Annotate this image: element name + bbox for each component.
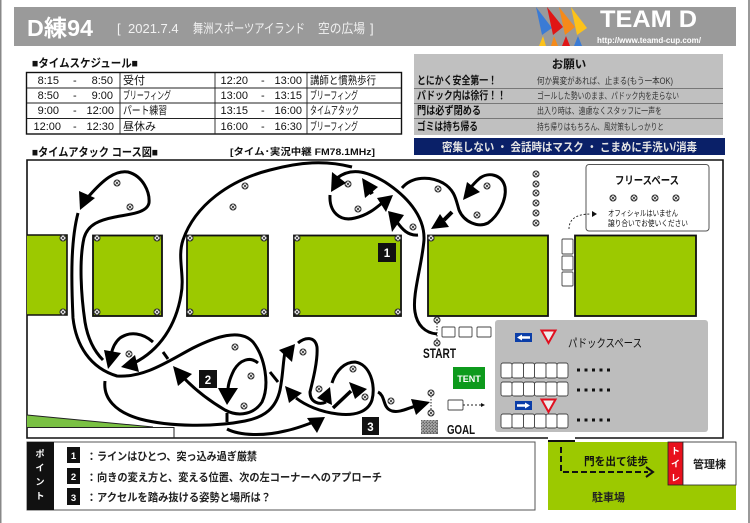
goal flag: [421, 420, 438, 434]
point 3: ：: [86, 492, 97, 504]
event date and venue: 舞洲スポーツアイランド: [193, 21, 305, 36]
paddock entry arrow and sign: [515, 400, 556, 412]
point 2: [67, 468, 382, 484]
point 3: 3: [71, 493, 76, 504]
header band: [14, 6, 736, 46]
schedule table: 12:00: [86, 105, 114, 117]
requests panel: ゴールした勢いのまま、パドック内を走らない: [537, 90, 679, 101]
logo: flags: [536, 7, 587, 46]
radio info: [タイム･実況中継 FM78.1MHz]: [230, 146, 375, 158]
racing line: start into top section: [330, 172, 505, 334]
tent arrow with box: [448, 400, 485, 410]
points side label: ト: [35, 491, 45, 501]
marker 3: 3: [367, 422, 374, 434]
point 2: ：: [86, 472, 97, 484]
requests panel: [414, 54, 723, 135]
toilet: ト: [671, 446, 680, 456]
toilet: [668, 442, 683, 485]
points side label: ポ: [35, 449, 45, 459]
team name: TEAM D: [600, 6, 697, 33]
free space panel: [586, 164, 709, 231]
point 3: [67, 488, 271, 505]
schedule table: 9:00: [92, 90, 113, 102]
tent: [453, 367, 485, 389]
paddock space: [495, 320, 708, 432]
requests panel: 何か異変があれば、止まる(もう一本OK): [537, 75, 673, 86]
schedule table: ブリーフィング: [310, 88, 358, 102]
schedule table: 9:00: [38, 105, 59, 117]
schedule table: 16:30: [274, 121, 302, 133]
marker 2: [199, 370, 217, 388]
schedule table: ブリーフィング: [310, 119, 358, 133]
points side label: イ: [35, 463, 45, 473]
schedule table: 12:20: [220, 75, 248, 87]
point 1: ：: [86, 451, 97, 463]
free space panel: 譲り合いでお使いください: [608, 218, 688, 228]
schedule table: 8:50: [38, 90, 59, 102]
marker 1: 1: [384, 248, 391, 260]
schedule table: ブリーフィング: [123, 88, 171, 102]
start label: START: [423, 345, 456, 361]
marker 3: [362, 417, 379, 435]
toilet: レ: [671, 473, 680, 483]
marker 2: 2: [205, 375, 211, 387]
schedule table: 13:00: [220, 90, 248, 102]
walking route label: 門を出て徒歩: [584, 454, 648, 468]
schedule table: 講師と慣熟歩行: [310, 73, 376, 87]
schedule table: -: [261, 121, 265, 133]
management building: [683, 442, 736, 485]
schedule table: 16:00: [274, 105, 302, 117]
point 2: 向きの変え方と、変える位置、次の左コーナーへのアプローチ: [97, 470, 382, 484]
schedule table: -: [261, 75, 265, 87]
paddock space: パドックスペース: [568, 337, 642, 350]
schedule table: -: [73, 121, 77, 133]
schedule table: 16:00: [220, 121, 248, 133]
free space panel: フリースペース: [615, 175, 679, 187]
tent: TENT: [457, 374, 481, 384]
event date and venue: 空の広場: [318, 21, 365, 36]
point 1: ラインはひとつ、突っ込み過ぎ厳禁: [97, 449, 257, 463]
start and goal gate dotted lines: [431, 323, 437, 410]
points side label: [27, 442, 54, 510]
point 3: アクセルを踏み抜ける姿勢と場所は？: [97, 490, 271, 504]
paddock stalls row 2: [501, 382, 610, 396]
parking area: [548, 441, 736, 510]
schedule table: -: [261, 105, 265, 117]
schedule table: -: [73, 105, 77, 117]
event date and venue: [: [117, 21, 121, 36]
point 2: 2: [71, 472, 76, 483]
requests panel: とにかく安全第一！: [417, 73, 497, 87]
marker 1: [378, 243, 396, 262]
requests panel: 出入り時は、遠慮なくスタッフに一声を: [537, 105, 662, 116]
requests panel: お願い: [552, 58, 586, 71]
course map frame: [27, 160, 723, 438]
point 1: [67, 447, 257, 463]
requests panel: ゴミは持ち帰る: [417, 119, 478, 133]
grass wedge: [27, 415, 174, 438]
schedule table: -: [261, 90, 265, 102]
parking label: 駐車場: [592, 490, 625, 504]
schedule table: 13:15: [220, 105, 248, 117]
schedule table: 12:30: [86, 121, 114, 133]
schedule table: -: [73, 90, 77, 102]
points panel: [27, 442, 535, 510]
event date and venue: 2021.7.4: [128, 21, 179, 36]
course heading: ■タイムアタック コース図■: [32, 146, 158, 159]
schedule table: 8:15: [38, 75, 59, 87]
requests panel: パドック内は徐行！！: [417, 88, 506, 102]
schedule table: 13:00: [274, 75, 302, 87]
goal label: GOAL: [447, 422, 475, 437]
point 1: 1: [71, 451, 77, 462]
schedule table: 12:00: [33, 121, 61, 133]
schedule table: [26, 72, 402, 134]
schedule table: タイムアタック: [310, 104, 359, 117]
event date and venue: ]: [370, 21, 374, 36]
team url: http://www.teamd-cup.com/: [597, 35, 702, 45]
schedule table: パート練習: [123, 103, 167, 117]
schedule table: -: [73, 75, 77, 87]
grid boxes at start: [442, 327, 491, 337]
schedule table: 13:15: [274, 90, 302, 102]
toilet: イ: [671, 459, 680, 469]
free space dashed arrow: [569, 211, 597, 229]
schedule table: 昼休み: [123, 120, 156, 133]
corner and course cones: [60, 171, 539, 416]
paddock exit arrow and sign: [515, 330, 556, 343]
free space panel: オフィシャルはいません: [608, 209, 678, 218]
walking route dashed arrow: [561, 447, 653, 477]
schedule table: 受付: [123, 74, 145, 87]
side boxes: [562, 239, 573, 286]
points side label: ン: [35, 477, 45, 487]
racing line: finish section: [270, 339, 430, 415]
paddock stalls row 1: [501, 363, 610, 378]
paddock stalls row 3: [501, 414, 610, 428]
racing line: left loop: [72, 163, 352, 435]
title: D練94: [27, 15, 93, 41]
management building: 管理棟: [693, 457, 726, 471]
safety banner: 密集しない ・ 会話時はマスク ・ こまめに手洗い/消毒: [442, 140, 697, 154]
requests panel: 持ち帰りはもちろん、風対策もしっかりと: [537, 121, 664, 132]
green infield blocks: [27, 235, 696, 316]
safety banner: [414, 138, 725, 155]
requests panel: 門は必ず閉める: [417, 103, 481, 117]
schedule table: 8:50: [92, 75, 113, 87]
schedule heading: ■タイムスケジュール■: [32, 57, 138, 70]
